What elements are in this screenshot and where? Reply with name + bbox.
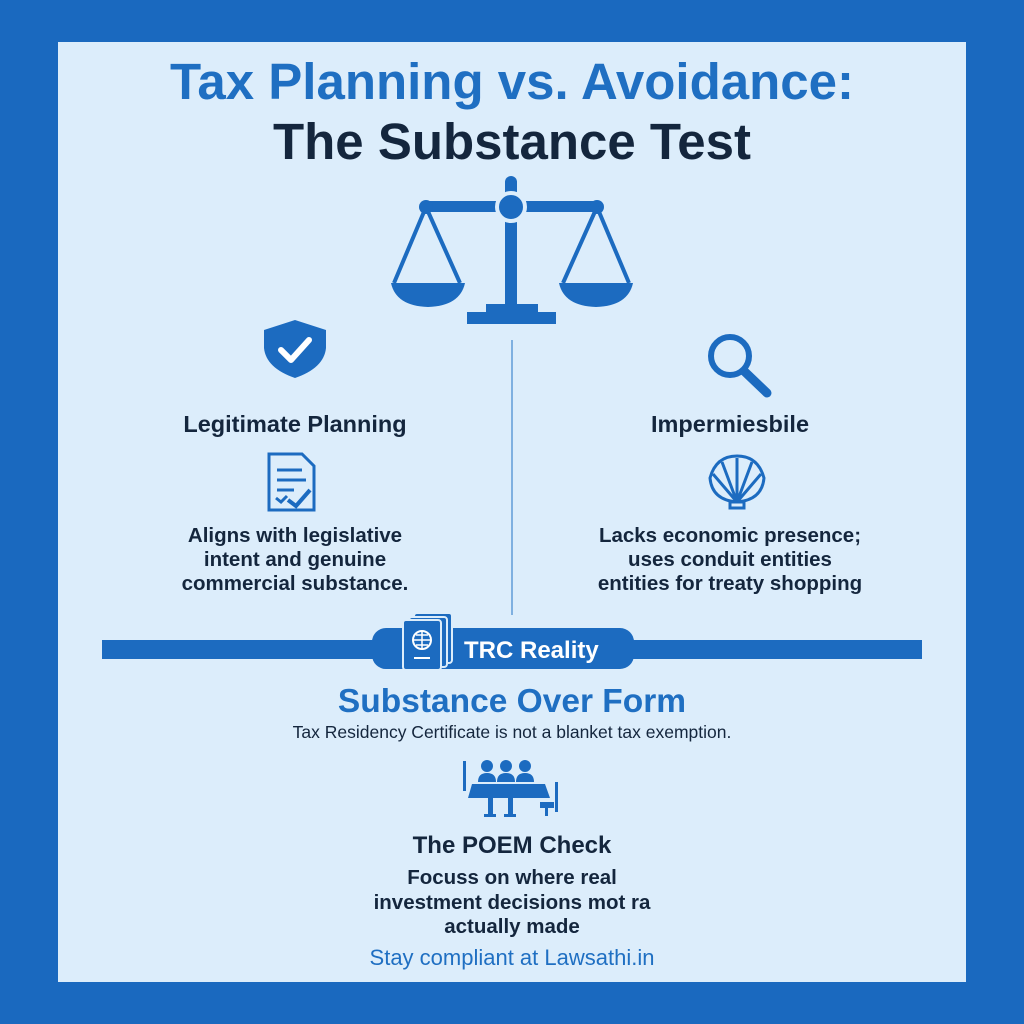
text: POEM: Focuss on where real — [407, 866, 617, 889]
bar: TRC reality — [102, 640, 922, 659]
text: legitimate: intent and genuine — [204, 548, 386, 571]
heading: impermissible: Impermiesbile — [651, 411, 809, 437]
text: TRC reality: TRC Reality — [464, 637, 599, 664]
text: legitimate: commercial substance. — [182, 572, 408, 595]
icon: shield — [264, 320, 326, 378]
text: impermissible: entities for treaty shopping — [598, 572, 862, 595]
heading: substance over form: Substance Over Form — [338, 683, 686, 720]
text: legitimate: Aligns with legislative — [188, 524, 402, 547]
title: The Substance Test — [273, 113, 751, 170]
text: POEM — [374, 866, 651, 938]
icon: passport — [402, 614, 453, 669]
heading: legitimate planning: Legitimate Planning — [183, 411, 407, 437]
text: impermissible: uses conduit entities — [628, 548, 832, 571]
text: legitimate — [182, 524, 408, 595]
icon: shell — [708, 454, 766, 510]
heading: POEM check: The POEM Check — [413, 832, 611, 859]
text: subtitle: Tax Residency Certificate is not a blanket tax exemption. — [293, 722, 731, 742]
text: POEM: investment decisions mot ra — [374, 890, 650, 914]
title: Tax Planning vs. Avoidance: — [170, 53, 854, 110]
text: impermissible — [598, 524, 862, 595]
icon: meeting — [463, 760, 558, 817]
icon: document — [268, 452, 316, 512]
title — [170, 53, 854, 170]
footer: Stay compliant at Lawsathi.in — [370, 945, 654, 970]
icon: magnifier — [708, 334, 772, 398]
text: POEM: actually made — [444, 915, 580, 938]
text: impermissible: Lacks economic presence; — [599, 524, 861, 547]
